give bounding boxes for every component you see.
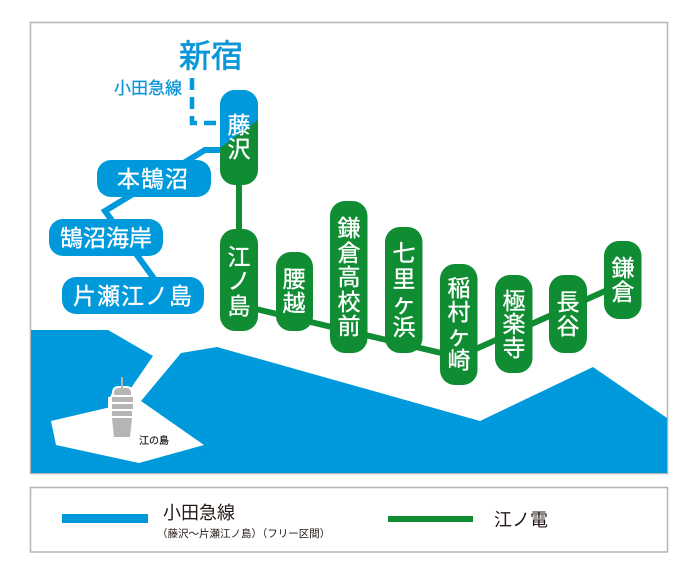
station: Shichirigahama: 浜	[392, 314, 416, 340]
legend: Odakyu line swatch	[62, 514, 148, 523]
heading: Shinjuku: 新宿	[179, 38, 243, 74]
station: Katase-Enoshima	[62, 277, 204, 314]
legend: free section note: （藤沢～片瀬江ノ島）（フリー区間）	[157, 527, 330, 540]
station: Fujisawa	[220, 90, 258, 185]
Odakyu line Fujisawa to Katase-Enoshima	[105, 150, 222, 280]
station: Gokurakuji: 極	[502, 288, 526, 314]
station: Hase: 谷	[556, 313, 580, 339]
station: Inamuragasaki: ヶ	[447, 323, 471, 350]
station: Hase	[549, 275, 587, 353]
sea with Enoshima island	[31, 330, 667, 473]
station: Kamakurakokomae: 高	[338, 264, 360, 290]
station: Hon-Kugenuma	[97, 160, 211, 197]
station: Kamakurakokomae: 校	[338, 289, 360, 315]
station: Enoshima	[220, 229, 258, 331]
station: Hon-Kugenuma: 本鵠沼	[117, 166, 189, 192]
station: Kamakura: 鎌	[612, 255, 634, 281]
station: Enoshima: 島	[228, 293, 250, 319]
station: Koshigoe: 腰	[282, 266, 306, 292]
station: Kamakurakokomae: 鎌	[338, 215, 360, 241]
station: Inamuragasaki: 崎	[448, 347, 470, 373]
label: Enoshima: 江の島	[139, 434, 169, 447]
label: Odakyu line: 小田急線	[114, 79, 182, 98]
station: Shichirigahama: 七	[392, 240, 416, 266]
Enoden line	[239, 180, 623, 357]
icon: Enoshima sea candle tower	[108, 377, 134, 438]
station: Gokurakuji	[495, 275, 532, 373]
station: Hase: 長	[556, 289, 580, 315]
station: Inamuragasaki: 稲	[448, 275, 470, 301]
station: Enoshima: ノ	[228, 268, 250, 294]
station: Kamakura	[604, 241, 642, 319]
legend: Enoden label: 江ノ電	[494, 510, 548, 530]
station: Gokurakuji: 寺	[502, 335, 526, 361]
station: Shichirigahama: 里	[392, 266, 416, 292]
station: Koshigoe: 越	[282, 290, 306, 316]
station: Kugenuma-Kaigan	[49, 219, 163, 256]
station: Katase-Enoshima: 片瀬江ノ島	[73, 283, 193, 309]
station: Fujisawa: 藤	[228, 112, 250, 138]
station: Kamakura: 倉	[612, 279, 634, 305]
station: Fujisawa: 沢	[228, 136, 250, 162]
station: Kamakurakokomae: 倉	[338, 240, 360, 266]
legend: Enoden swatch	[388, 516, 473, 522]
station: Koshigoe	[276, 252, 313, 331]
map frame	[30, 22, 668, 474]
station: Shichirigahama	[385, 227, 422, 353]
station: Enoshima: 江	[228, 244, 250, 270]
station: Inamuragasaki: 村	[448, 299, 470, 325]
legend panel	[30, 488, 668, 552]
station: Kamakurakokomae	[330, 201, 368, 353]
Odakyu dashed line to Shinjuku	[192, 78, 217, 123]
station: Inamuragasaki	[440, 264, 478, 385]
station: Kugenuma-Kaigan: 鵠沼海岸	[60, 225, 152, 251]
station: Gokurakuji: 楽	[502, 311, 526, 337]
legend: Odakyu line label: 小田急線	[163, 503, 235, 523]
station: Shichirigahama: ヶ	[392, 291, 416, 318]
station: Kamakurakokomae: 前	[338, 313, 360, 339]
